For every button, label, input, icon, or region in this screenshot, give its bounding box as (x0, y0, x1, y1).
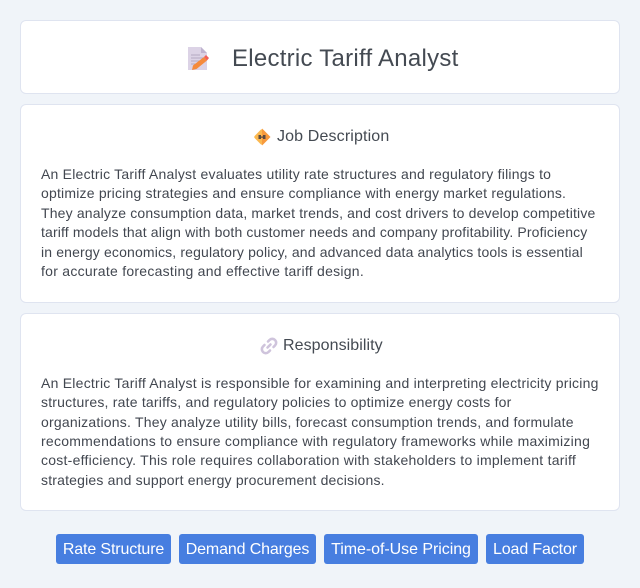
tag: load factor (486, 534, 584, 564)
text block: responsibility: cost-efficiency. This role requires collaboration with stakeholders to implement tariff (41, 452, 576, 468)
heading: responsibility: Responsibility (283, 337, 383, 354)
text block: job description: optimize pricing strategies and ensure compliance with energy market regulations. (41, 185, 566, 201)
icon: diamond sign (254, 128, 270, 146)
panel: title card (20, 20, 620, 94)
tag: load factor: Load Factor (493, 541, 577, 558)
text block: job description: An Electric Tariff Analyst evaluates utility rate structures and regulatory filings to (41, 166, 551, 182)
panel: responsibility (20, 313, 620, 511)
text block: job description: in energy economics, regulatory policy, and advanced data analytics tools is essential (41, 244, 583, 260)
text block: job description (41, 166, 595, 279)
text block: responsibility: strategies and support energy procurement decisions. (41, 472, 385, 488)
tag: rate structure (56, 534, 171, 564)
text block: responsibility: recommendations to ensure compliance with regulatory frameworks while maximizing (41, 433, 590, 449)
text block: job description: tariff models that align with both customer needs and company profitability. Proficiency (41, 224, 587, 240)
text block: responsibility: organizations. They analyze utility bills, forecast consumption trends, and formulate (41, 414, 574, 430)
text block: responsibility (41, 375, 599, 488)
tag: demand charges: Demand Charges (186, 541, 309, 558)
icon: chain link (260, 338, 278, 354)
tag: time-of-use pricing: Time-of-Use Pricing (331, 541, 471, 558)
text block: job description: for accurate forecasting and effective tariff design. (41, 263, 364, 279)
text block: responsibility: structures, rate tariffs, and regulatory policies to optimize energy costs for (41, 394, 512, 410)
panel: job description (20, 104, 620, 303)
icon: document with pencil (188, 47, 209, 70)
title: Electric Tariff Analyst (232, 45, 459, 72)
tag: time-of-use pricing (324, 534, 478, 564)
text block: job description: They analyze consumption data, market trends, and cost drivers to develop competitive (41, 205, 595, 221)
tag: demand charges (179, 534, 316, 564)
text block: responsibility: An Electric Tariff Analyst is responsible for examining and interpreting electricity pricing (41, 375, 599, 391)
tag: rate structure: Rate Structure (63, 541, 164, 558)
heading: job description: Job Description (277, 128, 389, 145)
